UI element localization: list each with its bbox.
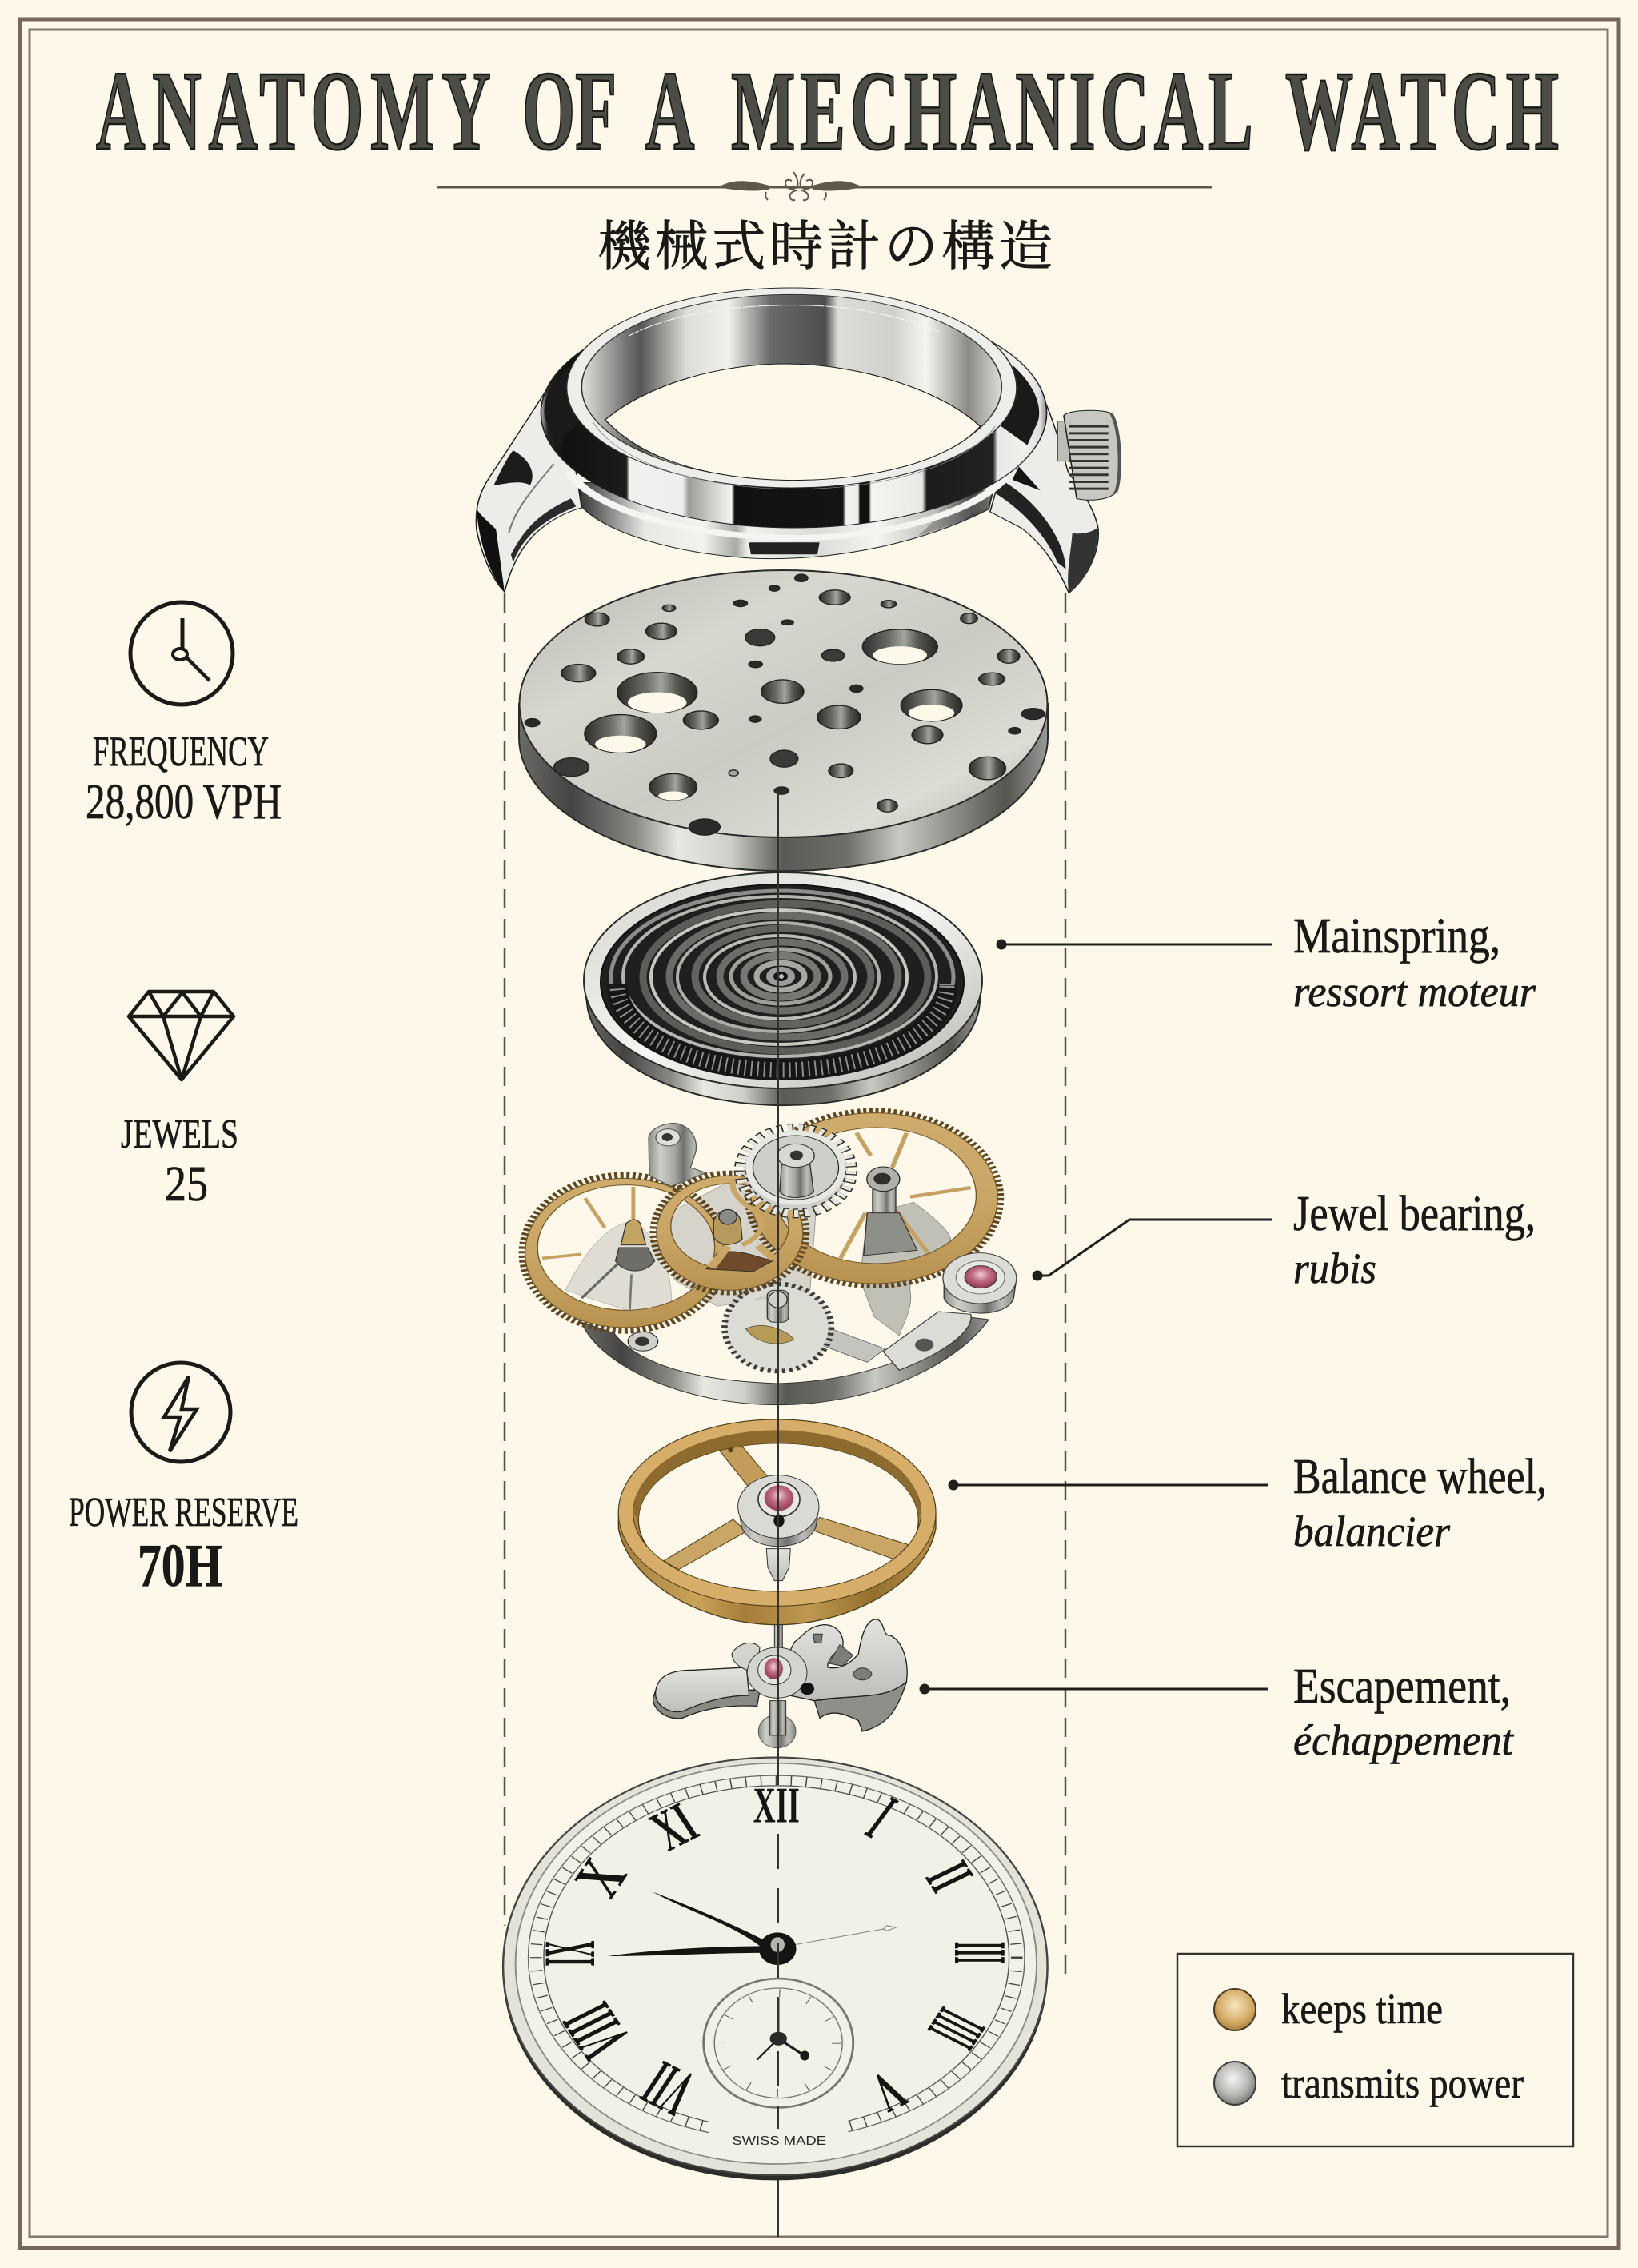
roman numerals: XII — [753, 1776, 800, 1833]
balance spokes — [664, 1434, 909, 1570]
callout: balance wheel: Balance wheel, — [1293, 1450, 1547, 1504]
part: escapement — [653, 1619, 907, 1748]
escapement lower pin — [758, 1701, 796, 1748]
translucent cocks — [565, 1221, 671, 1312]
icon: clock — [130, 602, 233, 705]
centre pinion — [759, 1932, 797, 1965]
roman numerals: V — [860, 2059, 917, 2124]
part: mainspring barrel — [584, 872, 982, 1105]
roman numerals: VIII — [547, 1992, 646, 2070]
sub-seconds dial — [704, 1979, 853, 2107]
power reserve label: POWER RESERVE — [69, 1490, 298, 1535]
part: watch case — [476, 288, 1120, 593]
bar across plate — [817, 1329, 885, 1362]
lower case band — [579, 482, 993, 559]
title: ANATOMY — [96, 49, 491, 174]
legend transmits power: transmits power — [1281, 2059, 1524, 2107]
title divider with ornament — [437, 172, 1212, 200]
rim lower bevel — [593, 421, 995, 489]
frequency label: FREQUENCY — [93, 729, 269, 775]
bezel slope — [541, 298, 1047, 528]
legend gold swatch — [1214, 1989, 1256, 2030]
panel: legend — [1177, 1954, 1573, 2146]
escapement pallet underside — [814, 1679, 906, 1731]
barrel teeth — [607, 984, 957, 1080]
icon: diamond — [129, 992, 234, 1080]
stepped bezel line — [569, 472, 1005, 538]
dial case edge — [503, 1763, 1048, 2180]
stat: frequency — [86, 602, 282, 829]
plate face — [520, 570, 1048, 837]
see-through opening — [605, 364, 981, 481]
balance rim — [618, 1419, 936, 1625]
balance hub — [738, 1475, 819, 1547]
icon: lightning bolt — [131, 1363, 230, 1462]
legend silver swatch — [1214, 2062, 1256, 2105]
stat: power reserve — [69, 1363, 298, 1599]
plate holes — [525, 574, 1045, 835]
central axis line — [777, 792, 779, 2237]
callout: mainspring — [997, 909, 1536, 1016]
legend keeps time: keeps time — [1281, 1985, 1443, 2033]
roman numerals: III — [937, 1942, 1021, 1964]
callout: jewel bearing — [1032, 1187, 1536, 1292]
inner wall — [581, 294, 1001, 480]
roman numerals: I — [853, 1783, 909, 1851]
jewel bearing — [943, 1253, 1017, 1313]
part: balance wheel — [618, 1419, 936, 1625]
spring coils — [611, 891, 953, 1064]
bottom steel gear — [725, 1284, 832, 1372]
minute hand — [608, 1946, 769, 1956]
balance hub pin — [766, 1549, 790, 1581]
barrel interior — [601, 884, 964, 1080]
jewels label: JEWELS — [121, 1112, 238, 1157]
jewels value: 25 — [165, 1157, 208, 1212]
base plate crescent — [581, 1317, 989, 1405]
right lug — [990, 386, 1098, 593]
left brass gear — [523, 1176, 725, 1331]
jewel pillar — [649, 1124, 706, 1186]
japanese subtitle: 機械式時計の構造 — [597, 218, 1053, 277]
right dashed axis — [1065, 593, 1066, 1979]
spring arbor — [766, 967, 795, 986]
dial bezel — [503, 1758, 1048, 2175]
title: MECHANICAL — [731, 49, 1253, 174]
plate side — [519, 704, 1048, 871]
middle brass gear — [654, 1174, 805, 1292]
escapement pallet body — [778, 1619, 907, 1701]
right brass gear — [749, 1112, 1000, 1285]
title: OF — [522, 49, 617, 174]
callout: jewel bearing: rubis — [1293, 1244, 1376, 1292]
barrel side — [584, 980, 982, 1105]
callout: escapement: échappement — [1293, 1716, 1515, 1764]
callout: balance wheel — [949, 1450, 1547, 1555]
top ring — [567, 288, 1017, 488]
callout: escapement: Escapement, — [1293, 1659, 1511, 1714]
roman numerals: II — [912, 1851, 988, 1901]
title: WATCH — [1285, 49, 1559, 174]
inner wall of rim — [633, 1430, 921, 1520]
escapement lever arm — [656, 1667, 749, 1711]
roman numerals: IIII — [912, 1998, 1001, 2059]
central movement mass — [664, 1173, 817, 1306]
left dashed axis — [504, 593, 505, 1926]
callout: mainspring: ressort moteur — [1293, 968, 1536, 1016]
part: main plate — [519, 570, 1048, 871]
bezel dark wedges — [544, 365, 1039, 450]
second hand — [777, 1926, 897, 1947]
small tab — [732, 1643, 760, 1671]
plate bridge — [883, 1312, 971, 1370]
power reserve value: 70H — [138, 1532, 222, 1599]
callout: jewel bearing: Jewel bearing, — [1293, 1187, 1536, 1241]
roman numerals: XI — [639, 1791, 709, 1863]
left lug — [476, 392, 581, 592]
frequency value: 28,800 VPH — [86, 775, 282, 829]
top steel gear — [741, 1128, 851, 1213]
escapement hub — [747, 1647, 814, 1698]
plate screw — [628, 1332, 658, 1351]
part: dial — [503, 1758, 1048, 2180]
roman numerals: VII — [629, 2047, 708, 2130]
roman numerals — [529, 1776, 1021, 2130]
callout: mainspring: Mainspring, — [1293, 909, 1500, 964]
roman numerals: IX — [529, 1941, 610, 1967]
callout: escapement — [920, 1659, 1515, 1764]
crown — [1057, 410, 1120, 500]
swiss made: SWISS MADE — [732, 2133, 826, 2147]
inner wall seat line — [629, 305, 940, 336]
hour hand — [653, 1891, 769, 1945]
roman numerals: X — [560, 1848, 641, 1907]
part: gear train — [523, 1112, 1017, 1405]
barrel rim — [584, 872, 982, 1088]
callout: balance wheel: balancier — [1293, 1507, 1451, 1555]
escapement upper pin — [774, 1625, 782, 1649]
minute track — [529, 1775, 1025, 2150]
title — [96, 49, 1559, 174]
escapement arm underside — [653, 1690, 760, 1719]
stat: jewels — [121, 992, 238, 1212]
title: A — [645, 49, 695, 174]
